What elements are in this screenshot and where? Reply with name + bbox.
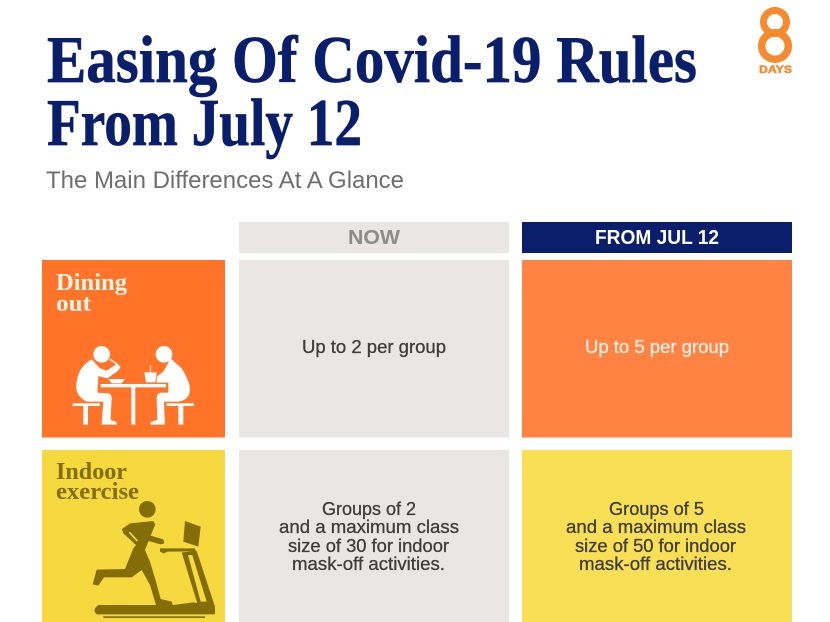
panel: from Jul 12 dining — [522, 260, 792, 438]
subtitle: The Main Differences At A Glance — [46, 167, 404, 194]
heading: dining out: Dining — [56, 270, 127, 296]
title: Easing Of Covid-19 Rules — [47, 23, 697, 97]
panel: dining out label — [42, 260, 225, 438]
column header: now — [239, 222, 509, 253]
icon: person running on a treadmill — [93, 501, 215, 618]
panel: now dining: Up to 2 per group — [302, 337, 446, 357]
panel: indoor exercise label — [42, 450, 225, 622]
column header: from Jul 12 — [522, 222, 792, 253]
panel: from Jul 12 dining: Up to 5 per group — [585, 337, 729, 357]
icon: two people dining at a table — [73, 346, 194, 425]
panel: now indoor exercise — [239, 450, 509, 622]
panel: from Jul 12 indoor exercise — [522, 450, 792, 622]
heading: indoor exercise — [56, 459, 139, 505]
column header: from Jul 12: FROM JUL 12 — [595, 227, 719, 249]
column header: now: NOW — [348, 227, 400, 249]
panel: now dining — [239, 260, 509, 438]
panel: from Jul 12 indoor exercise: size of 50 for indoor — [575, 536, 736, 556]
panel: now indoor exercise: and a maximum class — [279, 517, 459, 537]
heading: indoor exercise: Indoor — [56, 459, 127, 485]
panel: from Jul 12 indoor exercise: and a maximum class — [566, 517, 746, 537]
title — [47, 23, 697, 160]
heading: indoor exercise: exercise — [56, 479, 139, 505]
panel: from Jul 12 indoor exercise: Groups of 5 — [609, 499, 704, 519]
panel: now indoor exercise: size of 30 for indoor — [288, 536, 449, 556]
heading: dining out: out — [56, 291, 91, 317]
panel: now indoor exercise: mask-off activities. — [292, 554, 445, 574]
title: From July 12 — [47, 86, 362, 160]
panel: now indoor exercise: Groups of 2 — [322, 499, 416, 519]
panel: from Jul 12 indoor exercise: mask-off activities. — [579, 554, 732, 574]
heading: dining out — [56, 270, 127, 317]
logo: 8 Days: DAYS — [759, 64, 792, 76]
logo: 8 Days — [759, 10, 792, 76]
